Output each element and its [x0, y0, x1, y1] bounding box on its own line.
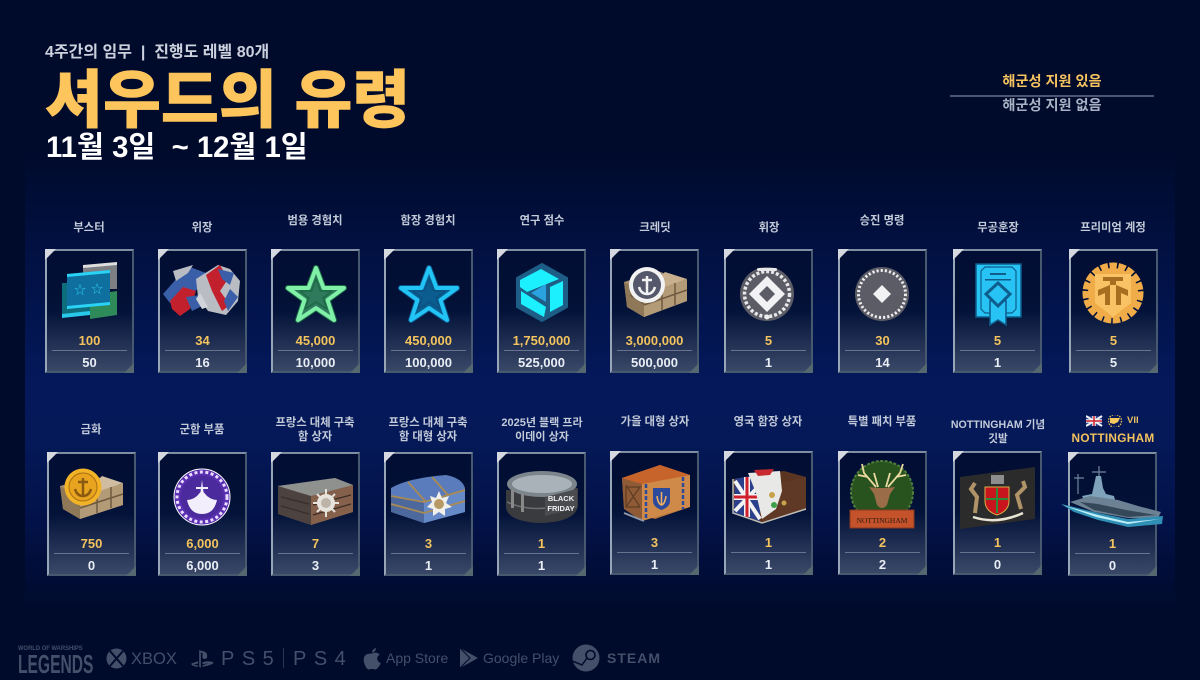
value: without support: 1 — [425, 558, 432, 573]
value: without support: 1 — [765, 557, 772, 572]
label: Nottingham commemorative flag — [951, 418, 1045, 445]
card: warship parts — [158, 452, 247, 576]
label: Black Friday crate — [501, 416, 583, 443]
label: Nottingham commemorative flag: 깃발 — [988, 433, 1008, 445]
label: Black Friday crate: 2025년 블랙 프라 — [501, 417, 583, 429]
value: with support: 30 — [875, 333, 890, 348]
label: booster: 부스터 — [73, 222, 105, 234]
card: camouflage — [158, 249, 247, 373]
legend: without port support: 해군성 지원 없음 — [1002, 98, 1102, 114]
value: with support: 1,750,000 — [513, 333, 570, 348]
logo: World of Warships Legends: WORLD OF WARSHIPS — [18, 645, 83, 652]
logo: Google Play — [460, 649, 560, 667]
ship tier line — [1086, 415, 1139, 427]
icon: black friday drum: BLACK — [548, 494, 575, 503]
card: ship experience — [384, 249, 473, 373]
value: with support: 1 — [538, 536, 545, 551]
icon: promotion badge — [855, 267, 909, 321]
legend — [950, 74, 1154, 114]
card: credits — [610, 249, 699, 373]
value: without support: 1 — [651, 557, 658, 572]
value: with support: 6,000 — [186, 536, 219, 551]
card: British ship crate — [724, 451, 813, 575]
value: without support: 50 — [82, 355, 97, 370]
icon: doubloon crate — [60, 468, 124, 519]
label: French destroyer crate — [275, 416, 355, 443]
value: without support: 16 — [195, 355, 210, 370]
logo: PS5 and PS4 — [191, 648, 353, 670]
value: with support: 1 — [765, 535, 772, 550]
label: warship parts: 군함 부품 — [180, 424, 224, 436]
value: without support: 1 — [994, 355, 1001, 370]
value: with support: 1 — [1109, 536, 1116, 551]
card: premium account — [1069, 249, 1158, 373]
subtitle: 4주간의 임무 | 진행도 레벨 80개 — [45, 44, 269, 61]
icon: union jack crate — [732, 469, 806, 524]
value: with support: 3 — [651, 535, 658, 550]
icon: commemorative flag — [960, 467, 1035, 529]
card: special patch parts — [838, 451, 927, 575]
logo: Xbox: XBOX — [131, 650, 177, 668]
card: autumn large crate — [610, 451, 699, 575]
icon: booster flags — [62, 262, 117, 319]
label: French destroyer large crate — [388, 416, 468, 443]
label: camouflage: 위장 — [192, 222, 212, 234]
footer: platform logos — [18, 644, 661, 679]
card: merit medal — [953, 249, 1042, 373]
icon: black friday drum: FRIDAY — [547, 504, 575, 513]
value: with support: 5 — [765, 333, 772, 348]
value: with support: 5 — [1110, 333, 1117, 348]
date range: 11월 3일 ~ 12월 1일 — [46, 131, 308, 164]
label: autumn large crate: 가을 대형 상자 — [621, 416, 689, 428]
value: without support: 500,000 — [631, 355, 678, 370]
value: without support: 3 — [312, 558, 319, 573]
card: Black Friday crate — [497, 452, 586, 576]
label: special patch parts: 특별 패치 부품 — [848, 416, 916, 428]
label: doubloons: 금화 — [81, 424, 101, 436]
value: with support: 100 — [79, 333, 100, 348]
value: without support: 0 — [88, 558, 95, 573]
title: 셔우드의 유령 — [45, 66, 410, 136]
value: without support: 1 — [538, 558, 545, 573]
label: premium account: 프리미엄 계정 — [1080, 222, 1146, 234]
icon: blue chest — [390, 475, 466, 523]
icon: green star — [285, 265, 347, 323]
label: French destroyer large crate: 프랑스 대체 구축 — [388, 417, 468, 429]
icon: booster flags: ☆ — [91, 282, 103, 296]
icon: orange crate — [622, 465, 690, 522]
icon: credit crate — [624, 267, 688, 317]
ship name: NOTTINGHAM — [1072, 431, 1154, 445]
value: with support: 450,000 — [405, 333, 452, 348]
icon: black friday drum — [506, 471, 578, 523]
value: with support: 45,000 — [296, 333, 335, 348]
value: without support: 0 — [994, 557, 1001, 572]
icon: gold laurel shield — [1082, 262, 1144, 324]
icon: silver laurel medal — [740, 267, 794, 321]
logo: Google Play: Google Play — [483, 650, 559, 666]
label: Nottingham commemorative flag: NOTTINGHAM 기념 — [951, 419, 1045, 431]
value: with support: 750 — [81, 536, 102, 551]
value: with support: 3,000,000 — [626, 333, 683, 348]
icon: warship — [1061, 466, 1163, 527]
label: promotion orders: 승진 명령 — [860, 215, 904, 227]
background panel — [25, 150, 1175, 610]
value: without support: 5 — [1110, 355, 1117, 370]
value: with support: 2 — [879, 535, 886, 550]
card: ship Nottingham — [1068, 452, 1157, 576]
label: merit medal: 무공훈장 — [977, 222, 1019, 234]
card: Nottingham commemorative flag — [953, 451, 1042, 575]
legend: without port support — [950, 95, 1154, 116]
card: free experience — [271, 249, 360, 373]
icon: stag patch: NOTTINGHAM — [857, 516, 908, 525]
logo: App Store: App Store — [386, 650, 448, 666]
logo: PS5 and PS4: PS5 — [221, 648, 281, 670]
icon: research hexagon — [516, 263, 568, 322]
value: with support: 3 — [425, 536, 432, 551]
label: Black Friday crate: 이데이 상자 — [515, 431, 569, 443]
label: medals: 휘장 — [759, 222, 779, 234]
icon: camouflage — [163, 265, 240, 316]
value: without support: 6,000 — [186, 558, 219, 573]
label: French destroyer crate: 함 상자 — [298, 431, 332, 443]
label: research points: 연구 점수 — [520, 215, 564, 227]
value: with support: 7 — [312, 536, 319, 551]
card: booster — [45, 249, 134, 373]
ship tier: VII — [1127, 415, 1139, 426]
label: ship experience: 함장 경험치 — [400, 215, 456, 227]
value: without support: 10,000 — [296, 355, 335, 370]
value: without support: 100,000 — [405, 355, 452, 370]
logo: Xbox — [106, 648, 177, 668]
label: French destroyer crate: 프랑스 대체 구축 — [275, 417, 355, 429]
value: with support: 5 — [994, 333, 1001, 348]
logo: App Store — [364, 648, 448, 670]
icon: booster flags: ☆ — [74, 283, 86, 297]
card: research points — [497, 249, 586, 373]
value: without support: 525,000 — [518, 355, 565, 370]
legend: with port support: 해군성 지원 있음 — [1002, 74, 1102, 90]
logo: World of Warships Legends: LEGENDS — [18, 649, 93, 679]
value: without support: 2 — [879, 557, 886, 572]
icon: stag patch — [850, 460, 914, 528]
icon: british flag and premium badge — [1086, 415, 1122, 427]
icon: wooden crate — [278, 478, 353, 525]
label: credits: 크레딧 — [639, 222, 671, 234]
value: without support: 1 — [765, 355, 772, 370]
logo: Steam — [572, 644, 661, 672]
card: French destroyer large crate — [384, 452, 473, 576]
label: British ship crate: 영국 함장 상자 — [734, 416, 802, 428]
icon: certificate — [975, 263, 1022, 326]
value: with support: 34 — [195, 333, 210, 348]
logo: Steam: STEAM — [607, 650, 661, 666]
icon: warship parts badge — [174, 468, 230, 526]
icon: blue star — [398, 265, 460, 323]
logo: PS5 and PS4: PS4 — [293, 648, 353, 670]
card: medals — [724, 249, 813, 373]
label: free experience: 범용 경험치 — [287, 215, 343, 227]
card: French destroyer crate — [271, 452, 360, 576]
value: with support: 1 — [994, 535, 1001, 550]
card: promotion orders — [838, 249, 927, 373]
card: doubloons — [47, 452, 136, 576]
label: French destroyer large crate: 함 대형 상자 — [399, 431, 457, 443]
value: without support: 14 — [875, 355, 890, 370]
value: without support: 0 — [1109, 558, 1116, 573]
